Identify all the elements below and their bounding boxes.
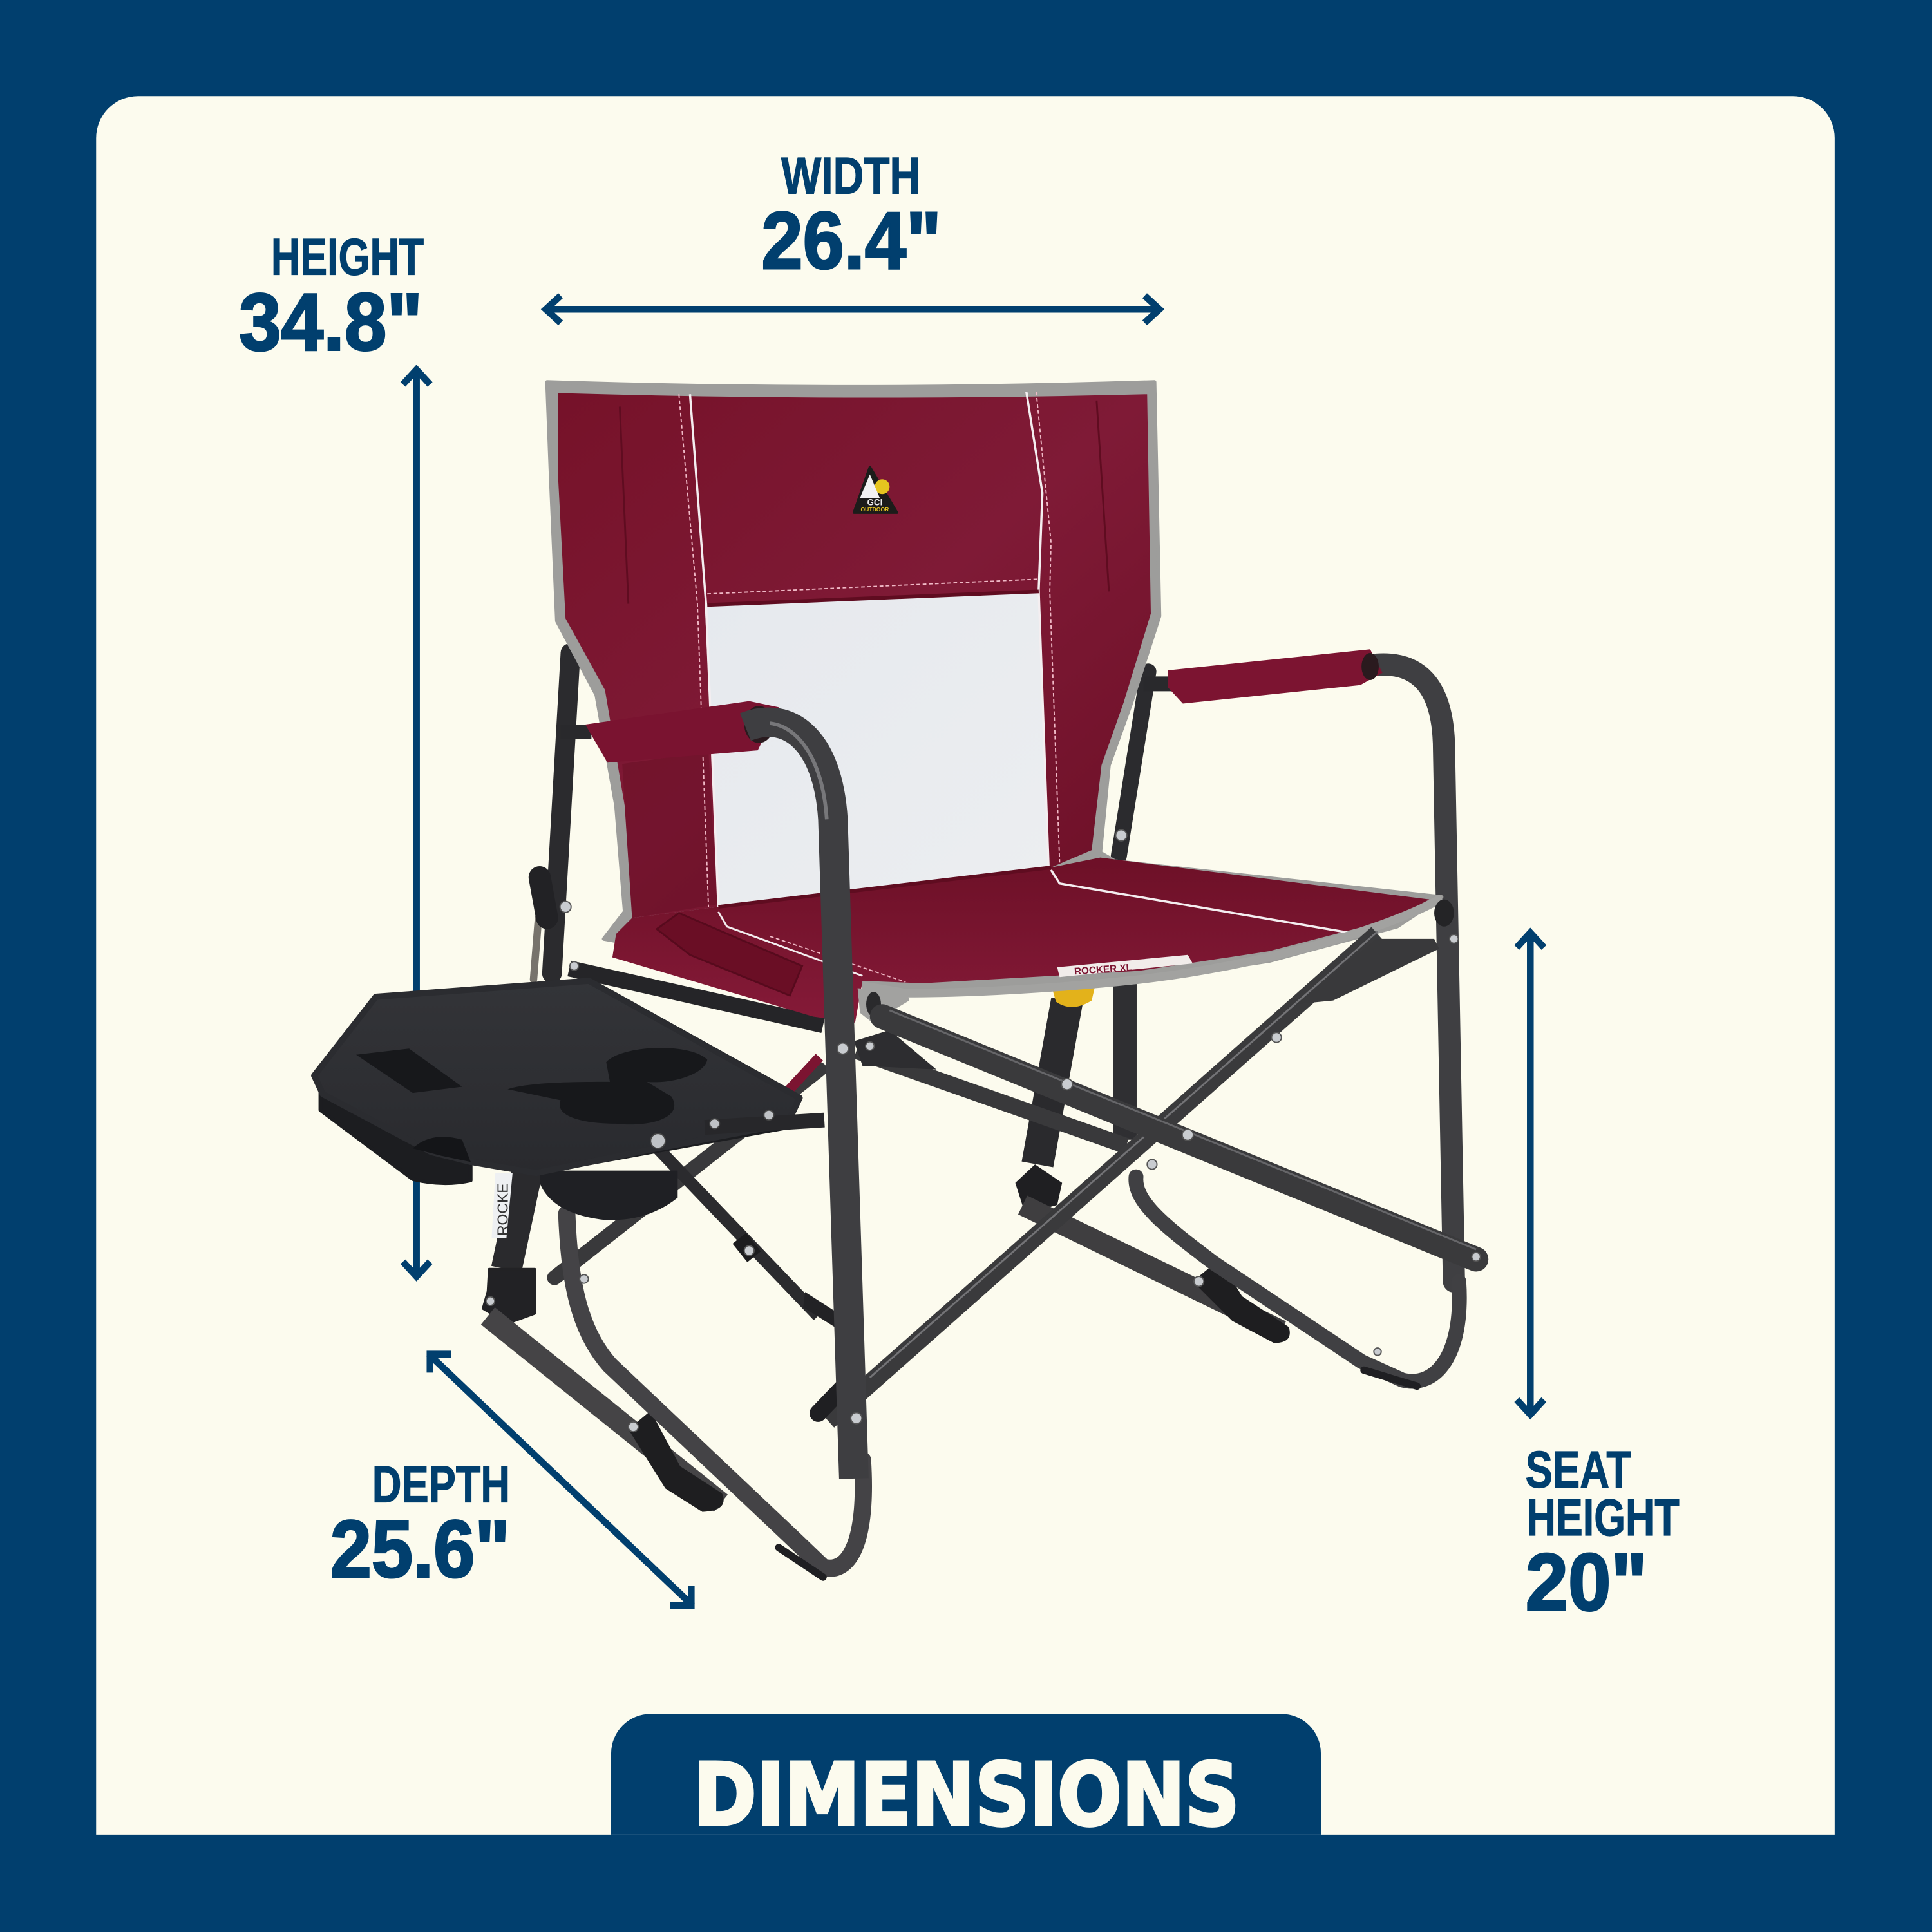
label: width: 26.4" xyxy=(761,195,942,286)
phone slot xyxy=(356,1048,462,1093)
title: DIMENSIONS xyxy=(694,1745,1240,1846)
logo patch xyxy=(854,467,897,513)
seat corner wrap xyxy=(858,988,909,1023)
left rail and foot xyxy=(488,1316,724,1512)
label: height: 34.8" xyxy=(239,276,422,367)
seat label: ROCKER XL xyxy=(1074,962,1133,977)
chair illustration xyxy=(314,382,1481,1577)
title tab xyxy=(611,1714,1321,1846)
logo patch: GCI xyxy=(867,497,882,507)
chair back fabric xyxy=(547,382,1442,993)
right seat corner knob xyxy=(1434,900,1454,927)
arrow: seat height xyxy=(1517,933,1544,1414)
right rear leg with yellow cap xyxy=(1016,985,1095,1214)
left rear leg and foot xyxy=(483,1171,535,1323)
right arm pad xyxy=(1144,649,1383,703)
cup sleeve xyxy=(540,1171,677,1220)
left rear leg and foot: ROCKE xyxy=(494,1183,511,1236)
notch xyxy=(413,1137,471,1162)
label: depth: DEPTH xyxy=(372,1455,510,1513)
left rocker tube xyxy=(567,1214,864,1577)
tray arm xyxy=(705,1120,824,1128)
left rear cross bars behind tray xyxy=(554,1057,838,1325)
seat label xyxy=(1057,955,1193,977)
back panel xyxy=(558,393,1151,918)
right rail and foot xyxy=(1023,1205,1290,1343)
left lower bracket bar under seat xyxy=(569,969,823,1025)
label: width: WIDTH xyxy=(781,147,920,205)
label: height xyxy=(239,229,424,367)
arrow: height xyxy=(403,370,430,1276)
arrow: width xyxy=(546,296,1159,323)
arrow: depth xyxy=(429,1354,692,1605)
cup holes xyxy=(507,1048,707,1124)
fabric shading xyxy=(622,752,717,918)
seat strap xyxy=(657,913,802,996)
label: height: HEIGHT xyxy=(271,229,424,287)
rear uprights xyxy=(533,653,1148,1140)
side table tray xyxy=(314,981,824,1220)
bolts xyxy=(486,830,1481,1432)
label: seat height: HEIGHT xyxy=(1527,1489,1680,1547)
label: width xyxy=(761,147,942,286)
label: seat height xyxy=(1526,1441,1680,1628)
label: seat height: 20" xyxy=(1526,1537,1647,1628)
seat fabric xyxy=(612,858,1454,1023)
left arm frame tube xyxy=(746,722,854,1479)
back trim xyxy=(547,382,1442,993)
right arm frame tube xyxy=(1136,665,1459,1386)
tray top xyxy=(314,981,800,1173)
label: depth: 25.6" xyxy=(330,1504,510,1595)
right cross bars xyxy=(818,931,1476,1421)
mesh panel xyxy=(705,590,1048,907)
piping and stitching xyxy=(620,392,1109,907)
left arm pad xyxy=(561,701,779,762)
label: depth xyxy=(330,1455,510,1595)
label: seat height: SEAT xyxy=(1526,1441,1631,1499)
logo patch: OUTDOOR xyxy=(860,506,889,513)
tray lip xyxy=(320,1084,788,1183)
